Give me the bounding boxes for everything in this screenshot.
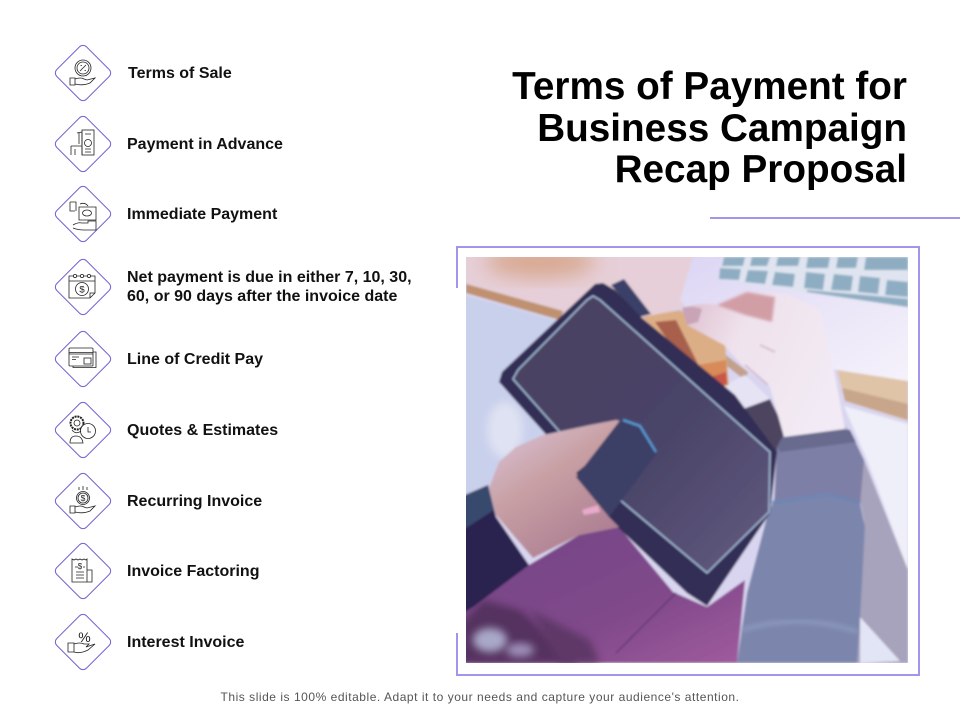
image frame (457, 247, 919, 675)
icon: recurring invoice (53, 471, 113, 531)
label: invoice factoring: Invoice Factoring (127, 563, 259, 580)
label: immediate payment: Immediate Payment (127, 206, 277, 223)
label: net payment (127, 269, 412, 305)
title (512, 65, 907, 191)
title: Recap Proposal (615, 148, 907, 191)
left sleeve (466, 494, 530, 612)
label: interest invoice: Interest Invoice (127, 634, 244, 651)
icon: credit card (53, 329, 113, 389)
icon group: diamonds (53, 43, 113, 672)
icon: terms of sale (53, 43, 113, 103)
label: net payment: 60, or 90 days after the invoice date (127, 288, 397, 305)
upper right sleeve cuff (773, 441, 864, 504)
icon: payment in advance (53, 114, 113, 174)
left hand (489, 420, 636, 558)
footer note: This slide is 100% editable. Adapt it to your needs and capture your audience's attention. (221, 690, 739, 704)
icon: net payment calendar (53, 257, 113, 317)
icon: invoice factoring (53, 541, 113, 601)
icon: net payment calendar: $ (79, 284, 85, 296)
icon: quotes and estimates (53, 400, 113, 460)
wallet back flap (611, 279, 651, 317)
label: line of credit: Line of Credit Pay (127, 351, 263, 368)
title: Business Campaign (537, 106, 907, 150)
right hand (682, 292, 845, 437)
table top (466, 257, 693, 319)
icon: invoice factoring: $ (78, 562, 83, 571)
label: recurring invoice: Recurring Invoice (127, 493, 262, 510)
lower right sleeve (737, 493, 865, 663)
icon: interest invoice (53, 612, 113, 672)
wood behind (837, 370, 908, 421)
label: payment in advance: Payment in Advance (127, 136, 283, 153)
wallet body (499, 283, 777, 606)
title underline (710, 217, 960, 219)
label: quotes and estimates: Quotes & Estimates (127, 422, 278, 439)
icon: interest invoice: % (78, 629, 91, 645)
title: Terms of Payment for (512, 65, 907, 108)
label: net payment: Net payment is due in either 7, 10, 30, (127, 269, 412, 286)
pants (460, 527, 745, 663)
laptop (680, 250, 915, 383)
icon: recurring invoice: $ (81, 493, 86, 503)
label: terms of sale: Terms of Sale (128, 65, 232, 82)
photo: hands holding a wallet and credit card (460, 246, 915, 670)
wallet front panel (513, 296, 770, 573)
icon: immediate payment (53, 184, 113, 244)
strap (576, 419, 657, 517)
card (642, 310, 729, 388)
